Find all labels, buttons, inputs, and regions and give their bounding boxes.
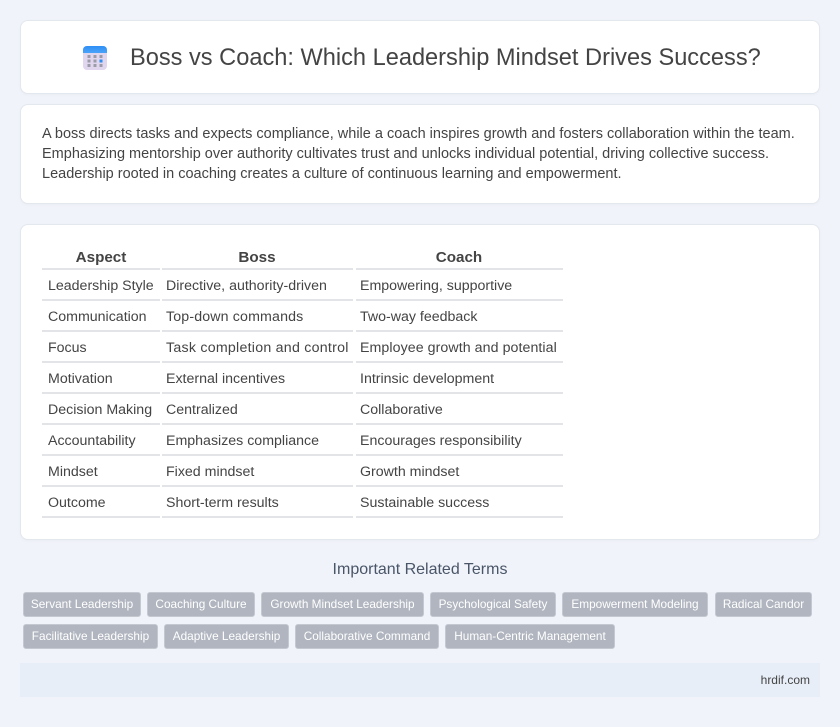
table: boss vs coach: Centralized bbox=[166, 402, 238, 418]
related terms tags bbox=[23, 592, 812, 649]
table: boss vs coach: Mindset bbox=[48, 464, 98, 480]
table: boss vs coach: Empowering, supportive bbox=[360, 278, 512, 294]
related terms tags: Collaborative Command bbox=[304, 629, 430, 643]
table: boss vs coach: Short-term results bbox=[166, 495, 279, 511]
table: boss vs coach: Sustainable success bbox=[360, 495, 489, 511]
table: boss vs coach: Fixed mindset bbox=[166, 464, 254, 480]
table: boss vs coach: Outcome bbox=[48, 495, 106, 511]
table: boss vs coach: Boss bbox=[238, 249, 276, 266]
table: boss vs coach: Motivation bbox=[48, 371, 113, 387]
related terms tags: Growth Mindset Leadership bbox=[270, 597, 415, 611]
table: boss vs coach: Decision Making bbox=[48, 402, 152, 418]
table: boss vs coach: Directive, authority-driven bbox=[166, 278, 327, 294]
table: boss vs coach: Coach bbox=[436, 249, 482, 266]
intro paragraph: Emphasizing mentorship over authority cultivates trust and unlocks individual potential, driving collective success. bbox=[42, 146, 769, 162]
table: boss vs coach: Communication bbox=[48, 309, 147, 325]
table: boss vs coach: Task completion and control bbox=[166, 340, 349, 356]
related terms tags: Human-Centric Management bbox=[454, 629, 606, 643]
icon: calendar bbox=[83, 46, 107, 70]
related terms tags: Coaching Culture bbox=[155, 597, 247, 611]
table: boss vs coach: Intrinsic development bbox=[360, 371, 494, 387]
table: boss vs coach: Two-way feedback bbox=[360, 309, 478, 325]
intro paragraph: A boss directs tasks and expects compliance, while a coach inspires growth and fosters collaboration within the team. bbox=[42, 126, 795, 142]
table: boss vs coach: Aspect bbox=[76, 249, 126, 266]
intro paragraph bbox=[42, 126, 795, 182]
comparison table panel bbox=[20, 224, 820, 540]
table: boss vs coach: Accountability bbox=[48, 433, 136, 449]
related terms heading: Important Related Terms bbox=[333, 561, 507, 578]
table: boss vs coach: Focus bbox=[48, 340, 87, 356]
related terms tags: Servant Leadership bbox=[31, 597, 133, 611]
related terms tags: Psychological Safety bbox=[439, 597, 547, 611]
table: boss vs coach: External incentives bbox=[166, 371, 285, 387]
table: boss vs coach: Leadership Style bbox=[48, 278, 154, 294]
table: boss vs coach: Emphasizes compliance bbox=[166, 433, 319, 449]
table: boss vs coach: Growth mindset bbox=[360, 464, 459, 480]
intro paragraph: Leadership rooted in coaching creates a culture of continuous learning and empowerment. bbox=[42, 166, 622, 182]
related terms tags: Radical Candor bbox=[723, 597, 804, 611]
table: boss vs coach: Collaborative bbox=[360, 402, 443, 418]
table: boss vs coach: Top-down commands bbox=[166, 309, 303, 325]
table: boss vs coach: Encourages responsibility bbox=[360, 433, 522, 449]
title: Boss vs Coach: Which Leadership Mindset Drives Success? bbox=[130, 45, 761, 71]
header panel bbox=[20, 20, 820, 94]
footer source: hrdif.com bbox=[761, 673, 810, 687]
intro text panel bbox=[20, 104, 820, 204]
table: boss vs coach: Employee growth and potential bbox=[360, 340, 557, 356]
related terms tags: Adaptive Leadership bbox=[173, 629, 280, 643]
related terms tags: Facilitative Leadership bbox=[32, 629, 149, 643]
table: boss vs coach bbox=[42, 249, 563, 518]
footer bar bbox=[20, 663, 820, 697]
related terms tags: Empowerment Modeling bbox=[571, 597, 699, 611]
